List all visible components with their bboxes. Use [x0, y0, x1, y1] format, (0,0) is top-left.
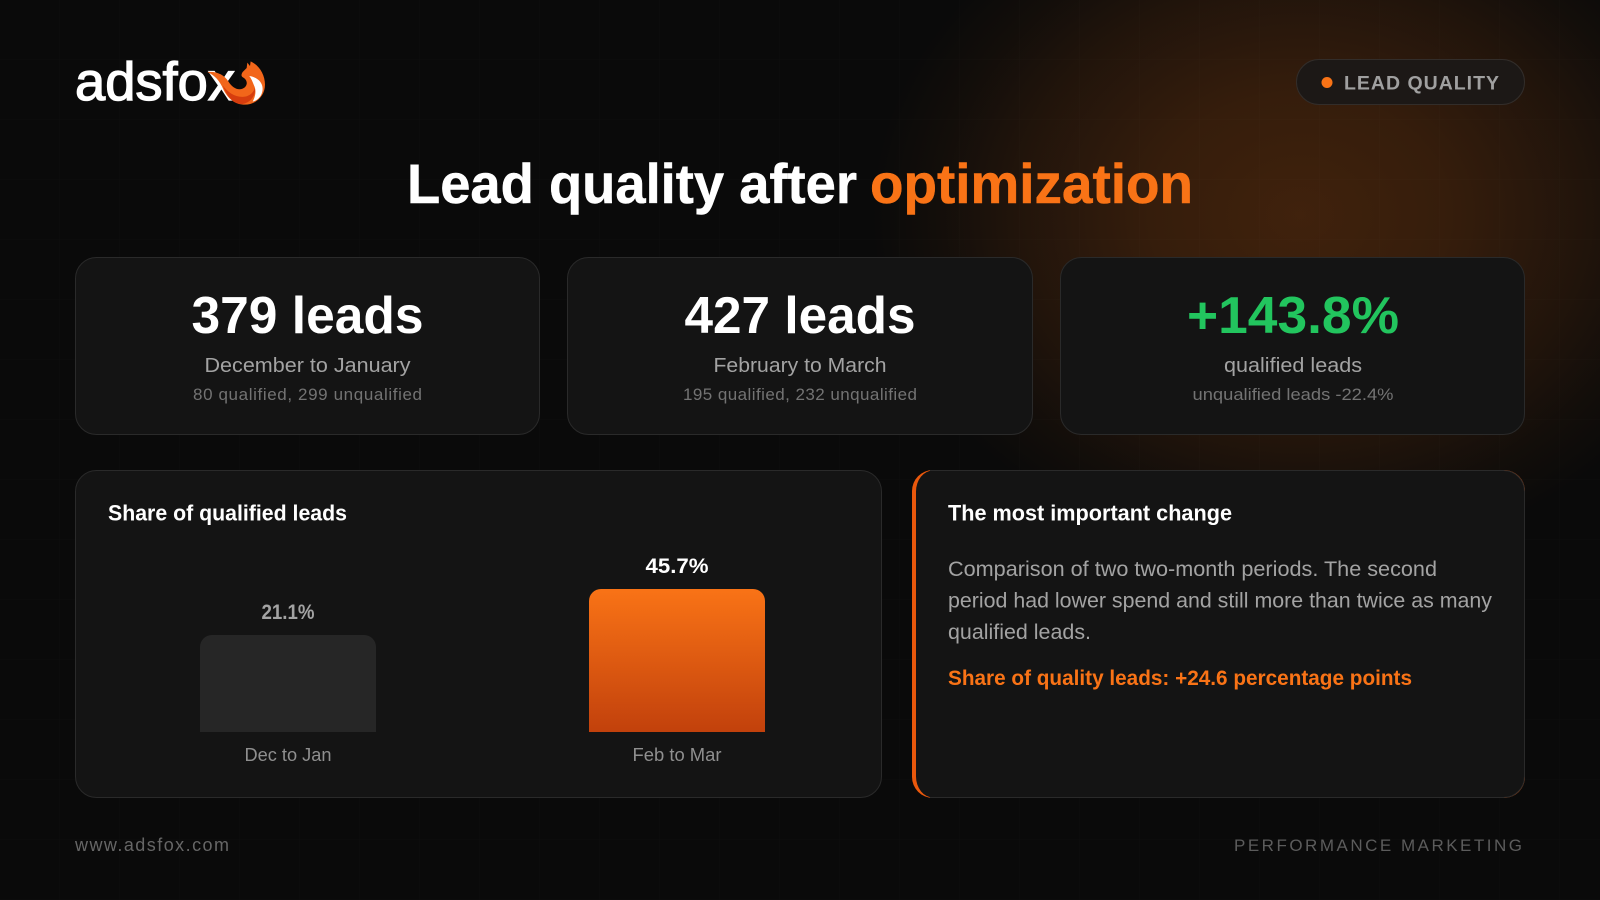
panel heading: The most important change: [948, 500, 1232, 526]
body text: Comparison of two two-month periods. The second: [948, 558, 1437, 581]
panel heading: Share of qualified leads: [108, 500, 347, 526]
stat label: qualified leads: [1224, 355, 1362, 377]
panel: December to January: [76, 258, 540, 434]
panel: the most important change: [912, 470, 1525, 798]
stat value: 427 leads: [684, 287, 916, 345]
bar: Feb to Mar: 45.7%: [646, 555, 709, 578]
badge label: LEAD QUALITY: [1344, 72, 1499, 94]
footer: website: www.adsfox.com: [74, 835, 229, 855]
logo wordmark: adsfox: [75, 52, 235, 112]
panel: February to March: [568, 258, 1032, 434]
stat period: December to January: [204, 355, 410, 377]
title: [407, 152, 1193, 215]
bar: Feb to Mar: Feb to Mar: [632, 745, 722, 765]
logo: adsfox: [75, 52, 265, 112]
body text: qualified leads.: [948, 621, 1091, 644]
bar: Feb to Mar: [589, 555, 765, 765]
bar: Dec to Jan: [200, 601, 376, 765]
stat period: February to March: [714, 355, 886, 377]
stat value: 379 leads: [192, 287, 424, 345]
bar: Dec to Jan: 21.1%: [262, 601, 315, 624]
panel: qualified leads change: [1060, 258, 1524, 434]
body text: [948, 558, 1493, 644]
stat detail: unqualified leads -22.4%: [1192, 385, 1394, 404]
stat detail: 80 qualified, 299 unqualified: [193, 385, 422, 404]
icon: fox flame swirl: [207, 61, 265, 105]
highlight: Share of quality leads: +24.6 percentage points: [948, 667, 1412, 690]
bar: Dec to Jan: Dec to Jan: [244, 745, 332, 765]
title: Lead quality after: [407, 152, 857, 215]
title: optimization: [870, 152, 1193, 215]
panel: share of qualified leads: [76, 470, 882, 798]
badge dot: [1322, 77, 1332, 88]
stat detail: 195 qualified, 232 unqualified: [683, 385, 917, 404]
badge: lead quality: [1296, 60, 1524, 104]
bar chart: [200, 555, 765, 765]
footer: tagline: PERFORMANCE MARKETING: [1234, 836, 1522, 855]
stat value: +143.8%: [1187, 287, 1399, 345]
body text: period had lower spend and still more than twice as many: [948, 590, 1493, 612]
